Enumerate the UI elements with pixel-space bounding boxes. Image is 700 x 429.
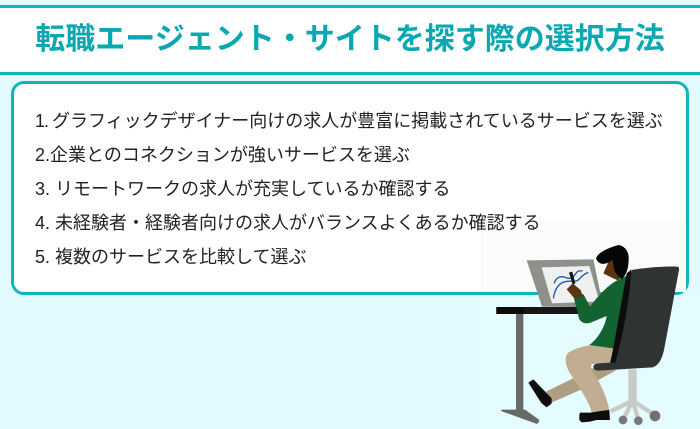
illustration backdrop inside panel	[481, 221, 686, 292]
head and hair	[596, 245, 629, 281]
panel: selection methods	[11, 81, 689, 295]
drawing tablet	[527, 259, 603, 307]
list item 5: 5. 複数のサービスを比較して選ぶ	[35, 247, 306, 267]
illustration: designer at tablet	[496, 245, 679, 425]
far leg	[546, 368, 617, 402]
list item 2: 2.企業とのコネクションが強いサービスを選ぶ	[35, 145, 410, 165]
near leg	[566, 345, 617, 412]
far shoe	[528, 379, 552, 407]
near shoe	[579, 410, 610, 422]
torso and arm	[574, 276, 627, 348]
desk	[496, 307, 584, 424]
list item 3: 3. リモートワークの求人が充実しているか確認する	[35, 179, 450, 199]
hand and stylus	[567, 272, 583, 299]
title band	[0, 5, 700, 75]
list item 1: 1. グラフィックデザイナー向けの求人が豊富に掲載されているサービスを選ぶ	[35, 111, 663, 131]
chair base	[611, 369, 660, 425]
list item 4: 4. 未経験者・経験者向けの求人がバランスよくあるか確認する	[35, 213, 541, 233]
illustration backdrop below panel	[481, 295, 700, 429]
title: 転職エージェント・サイトを探す際の選択方法	[35, 23, 665, 56]
office chair	[593, 266, 679, 371]
